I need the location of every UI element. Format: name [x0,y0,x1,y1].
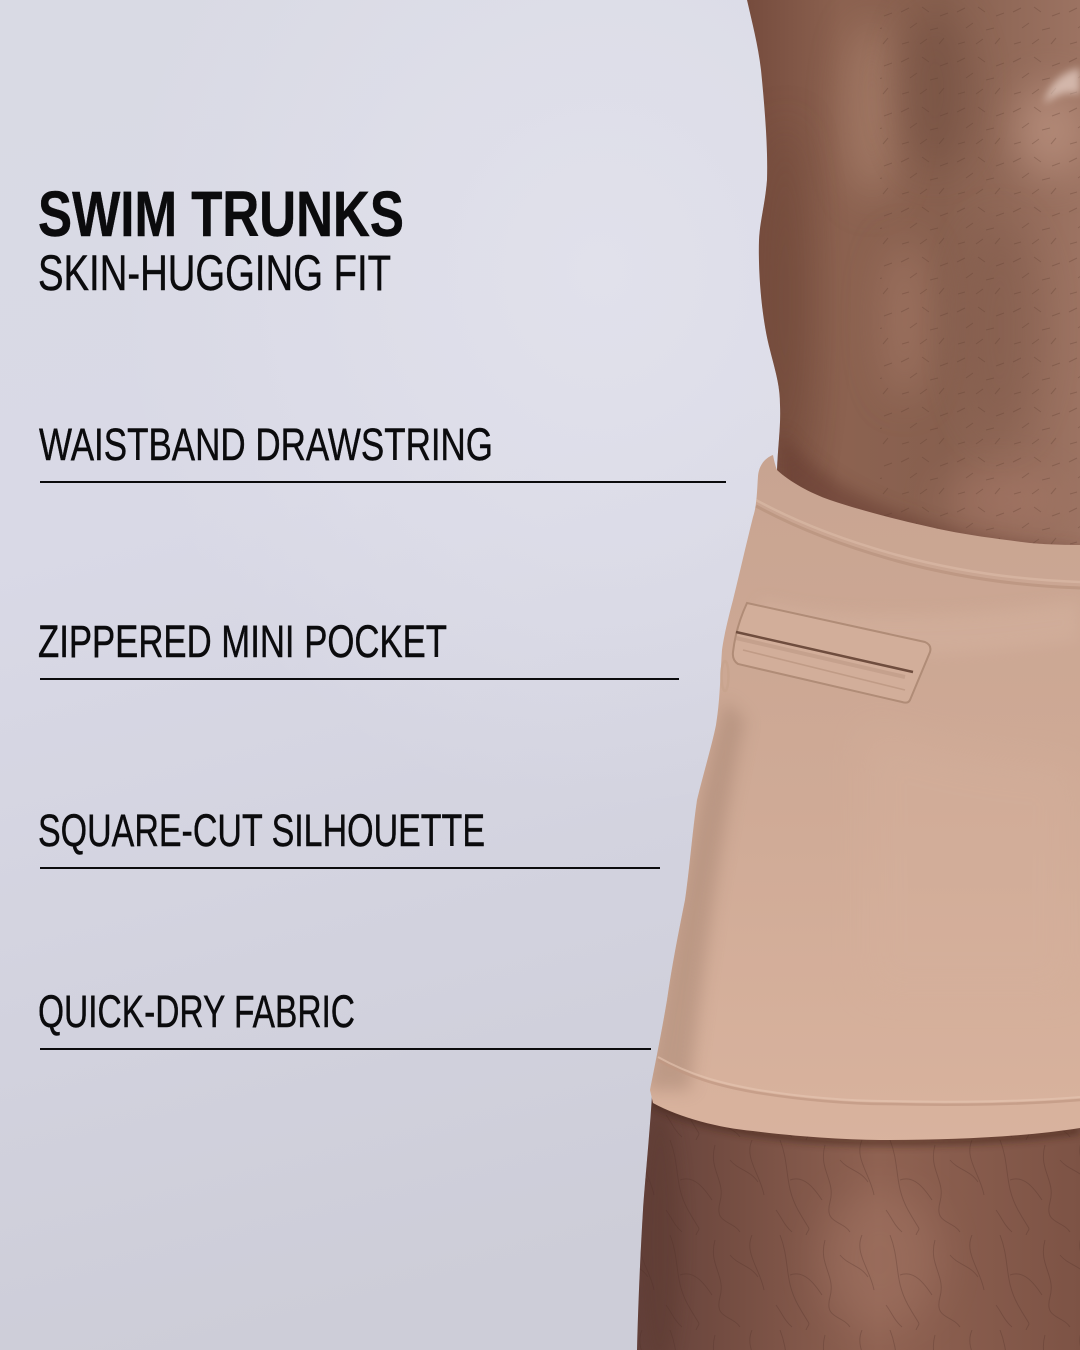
navel highlight [1044,68,1080,104]
waistband seam [756,506,1080,588]
feature: square-cut silhouette: SQUARE-CUT SILHOUETTE [38,805,485,856]
zipped pocket [722,603,930,703]
side shading [645,700,745,1090]
torso [740,0,1080,560]
hem seam [688,1073,1080,1106]
feature: zippered mini pocket: ZIPPERED MINI POCKET [38,616,447,667]
swim trunks garment [640,450,1080,1150]
feature: quick-dry fabric: QUICK-DRY FABRIC [38,986,355,1037]
subtitle: SKIN-HUGGING FIT [38,245,391,301]
leg [630,1090,1080,1350]
title: SWIM TRUNKS [38,178,404,250]
feature: waistband drawstring: WAISTBAND DRAWSTRING [39,419,493,470]
